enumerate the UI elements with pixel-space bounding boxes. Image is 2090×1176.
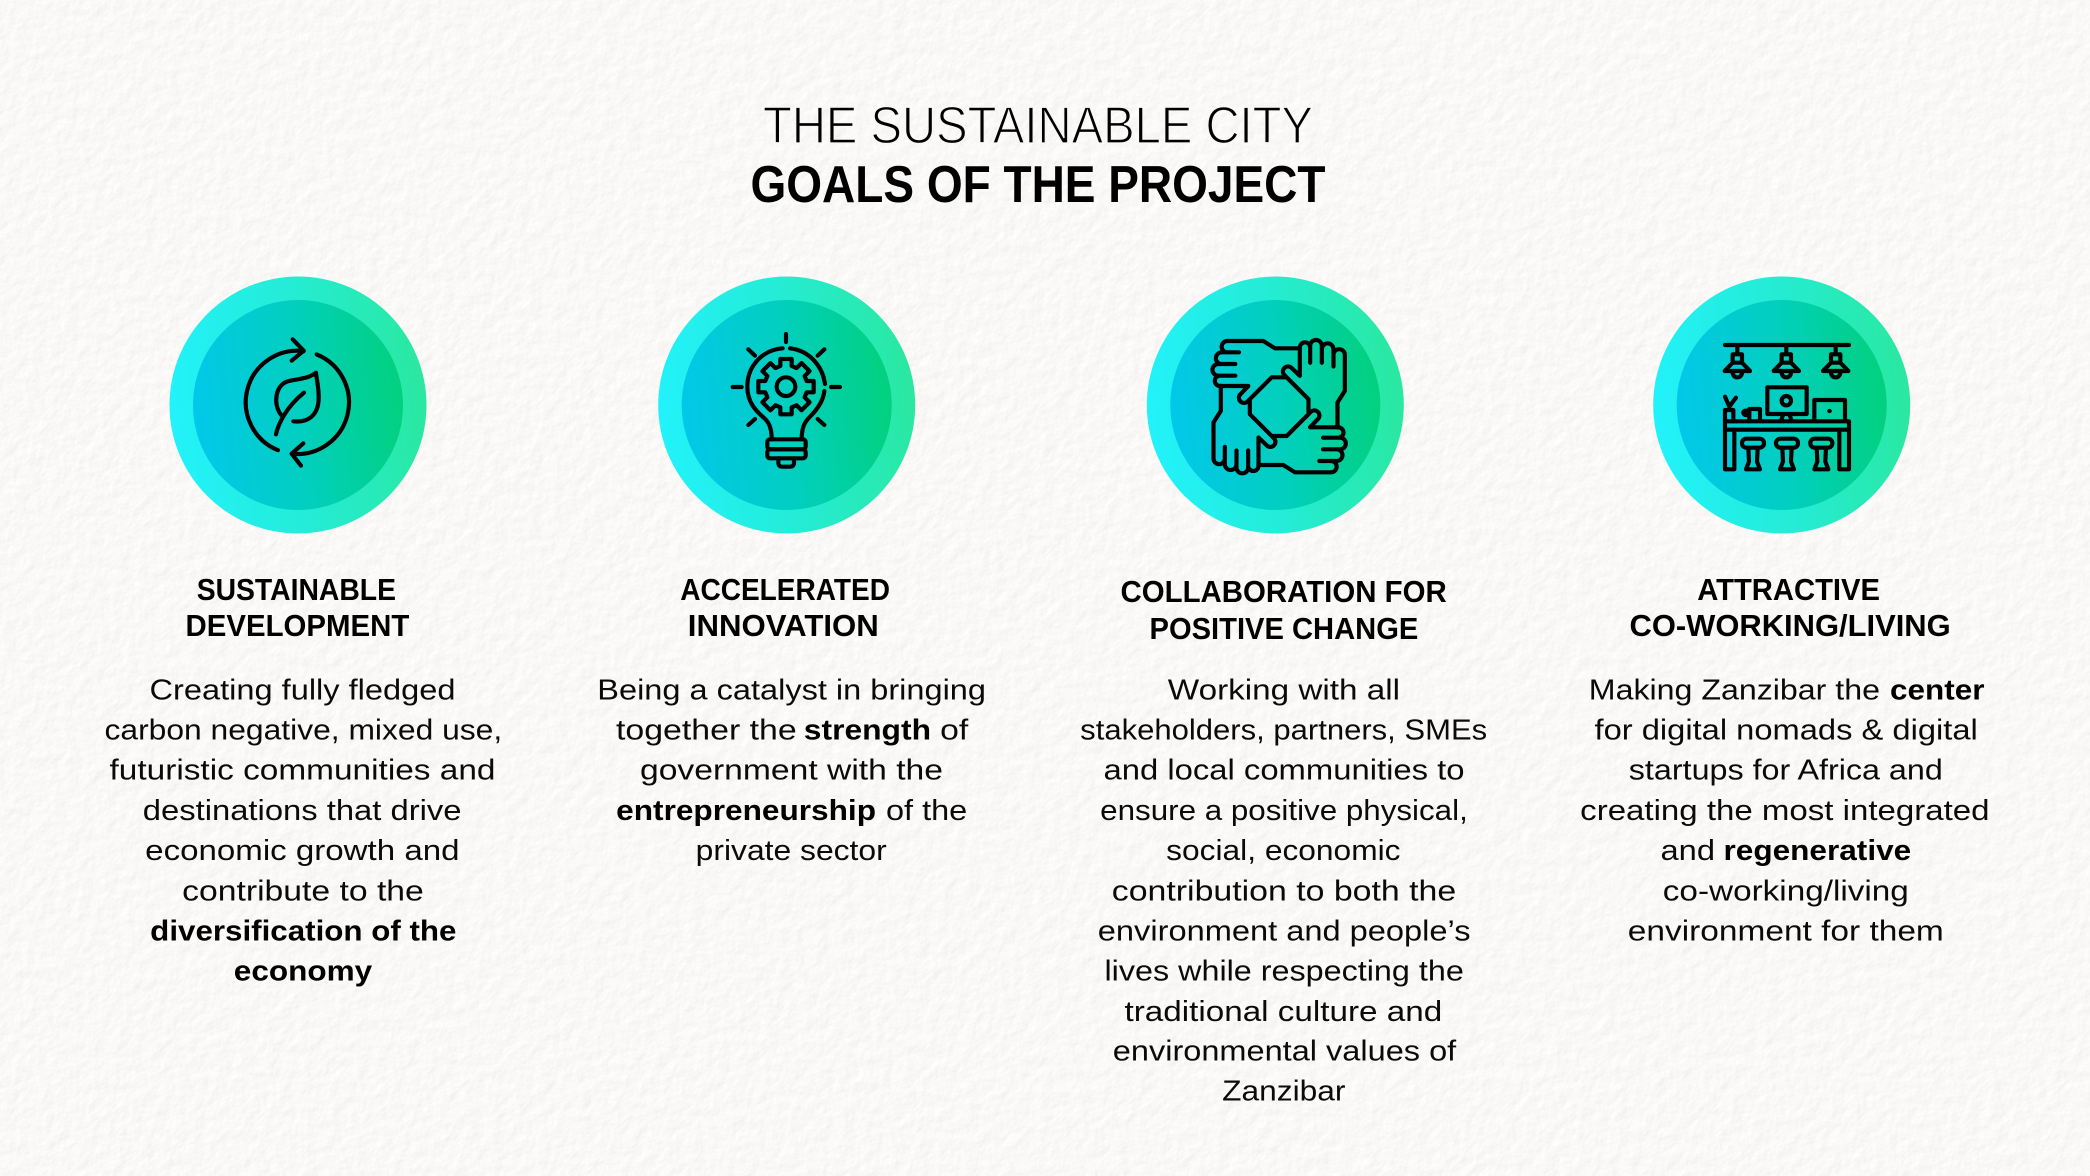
heading: sustainable development: SUSTAINABLE bbox=[197, 572, 396, 607]
text: collaboration description: ensure a positive physical, bbox=[1100, 795, 1468, 827]
text: co-working description bbox=[1580, 674, 1990, 948]
title bbox=[750, 97, 1326, 214]
text: sustainable development description bbox=[104, 674, 502, 988]
text: collaboration description: traditional culture and bbox=[1124, 996, 1442, 1028]
heading: attractive co-working/living: ATTRACTIVE bbox=[1697, 572, 1880, 607]
text: accelerated innovation description: together the bbox=[616, 715, 797, 747]
text: accelerated innovation description: of the bbox=[886, 795, 967, 827]
heading: attractive co-working/living: CO-WORKING/LIVING bbox=[1630, 608, 1951, 643]
text: collaboration description: stakeholders, partners, SMEs bbox=[1080, 715, 1487, 747]
panel: attractive co-working/living bbox=[1580, 276, 1990, 948]
text: sustainable development description: economic growth and bbox=[145, 835, 459, 867]
text: collaboration description: social, economic bbox=[1166, 835, 1400, 867]
text: collaboration description: and local communities to bbox=[1104, 755, 1464, 787]
text: co-working description: for digital nomads & digital bbox=[1594, 715, 1978, 747]
text: sustainable development description: Creating fully fledged bbox=[150, 674, 456, 706]
heading: collaboration for positive change: POSITIVE CHANGE bbox=[1150, 611, 1418, 646]
panel: collaboration for positive change bbox=[1080, 276, 1487, 1108]
text: co-working description: environment for them bbox=[1628, 916, 1944, 948]
text: accelerated innovation description: of bbox=[940, 715, 969, 747]
text: accelerated innovation description: private sector bbox=[696, 835, 887, 867]
heading: accelerated innovation: ACCELERATED bbox=[680, 572, 890, 607]
text: accelerated innovation description: Being a catalyst in bringing bbox=[597, 674, 986, 706]
text: sustainable development description: contribute to the bbox=[182, 876, 424, 908]
text: sustainable development description: diversification of the bbox=[150, 916, 456, 948]
text: sustainable development description: carbon negative, mixed use, bbox=[104, 715, 502, 747]
icon: co-working desk with lamps bbox=[1653, 276, 1910, 534]
text: collaboration description: lives while respecting the bbox=[1104, 956, 1464, 988]
text: co-working description: center bbox=[1890, 674, 1984, 706]
text: collaboration description: Zanzibar bbox=[1222, 1076, 1346, 1108]
title: THE SUSTAINABLE CITY bbox=[763, 97, 1313, 155]
text: sustainable development description: economy bbox=[234, 956, 372, 988]
text: co-working description: and bbox=[1660, 835, 1715, 867]
text: sustainable development description: destinations that drive bbox=[143, 795, 462, 827]
text: sustainable development description: futuristic communities and bbox=[110, 755, 496, 787]
panel: accelerated innovation bbox=[597, 276, 986, 867]
heading: attractive co-working/living bbox=[1630, 572, 1951, 643]
title: GOALS OF THE PROJECT bbox=[750, 156, 1326, 214]
text: accelerated innovation description: government with the bbox=[640, 755, 943, 787]
heading: sustainable development: DEVELOPMENT bbox=[186, 608, 409, 643]
text: collaboration description: contribution to both the bbox=[1112, 876, 1456, 908]
heading: collaboration for positive change: COLLABORATION FOR bbox=[1120, 574, 1447, 609]
icon: light bulb with gear bbox=[658, 276, 915, 534]
icon: four interlocking hands bbox=[1147, 276, 1404, 534]
text: accelerated innovation description: entrepreneurship bbox=[616, 795, 876, 827]
text: co-working description: Making Zanzibar the bbox=[1589, 674, 1880, 706]
text: co-working description: creating the most integrated bbox=[1580, 795, 1990, 827]
heading: accelerated innovation: INNOVATION bbox=[688, 608, 879, 643]
text: collaboration description: environment and people’s bbox=[1098, 916, 1470, 948]
text: co-working description: co-working/living bbox=[1663, 876, 1909, 908]
text: accelerated innovation description: strength bbox=[804, 715, 931, 747]
panel: sustainable development bbox=[104, 276, 502, 988]
text: accelerated innovation description bbox=[597, 674, 986, 867]
text: co-working description: regenerative bbox=[1724, 835, 1911, 867]
heading: collaboration for positive change bbox=[1120, 574, 1447, 646]
heading: accelerated innovation bbox=[680, 572, 890, 643]
text: collaboration description: Working with all bbox=[1168, 674, 1400, 706]
icon: recycling arrows with leaf bbox=[170, 276, 426, 534]
heading: sustainable development bbox=[186, 572, 409, 643]
text: collaboration description bbox=[1080, 674, 1487, 1108]
text: collaboration description: environmental values of bbox=[1113, 1035, 1457, 1067]
text: co-working description: startups for Africa and bbox=[1629, 755, 1943, 787]
